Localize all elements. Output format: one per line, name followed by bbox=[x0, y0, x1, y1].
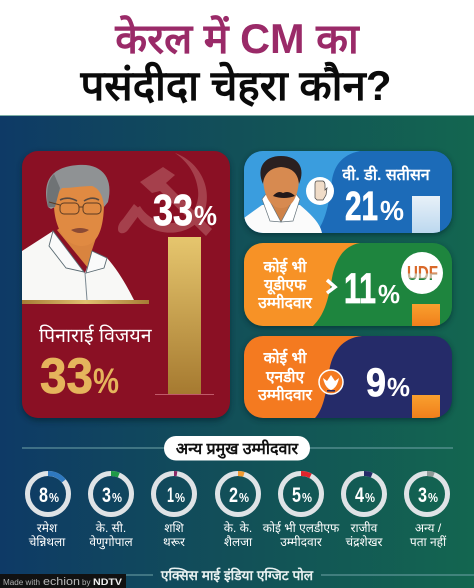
value: 11%: % bbox=[378, 279, 400, 309]
donut: Ramesh Chennithala 8%: 8 bbox=[39, 484, 48, 507]
donut: others / don't know 3%: अन्य / bbox=[415, 521, 442, 535]
watermark: echion bbox=[43, 576, 80, 588]
donut: Shashi Tharoor 1% bbox=[154, 474, 194, 549]
donut: Rajeev Chandrasekhar 4%: % bbox=[365, 491, 375, 505]
donut: any LDF candidate 5%: % bbox=[302, 491, 312, 505]
value: 9% bbox=[366, 368, 410, 397]
donut: K. C. Venugopal 3%: 3 bbox=[102, 484, 111, 507]
donut: any LDF candidate 5%: उम्मीदवार bbox=[280, 535, 323, 549]
donut: others / don't know 3% bbox=[406, 474, 448, 549]
arrow bbox=[327, 280, 335, 293]
donut: Shashi Tharoor 1%: थरूर bbox=[163, 535, 186, 549]
bar bbox=[412, 395, 440, 418]
watermark bbox=[0, 574, 126, 588]
title bbox=[79, 15, 392, 109]
donut: Rajeev Chandrasekhar 4%: राजीव bbox=[351, 521, 378, 535]
donut: others / don't know 3%: पता नहीं bbox=[410, 535, 447, 549]
panel: V. D. Satheesan bbox=[244, 151, 452, 233]
label: any UDF candidate bbox=[257, 257, 312, 312]
donut: Ramesh Chennithala 8%: % bbox=[49, 491, 59, 505]
watermark: NDTV bbox=[93, 577, 122, 587]
panel: Pinarayi Vijayan bbox=[22, 151, 230, 418]
donut: K. C. Venugopal 3%: के. सी. bbox=[96, 521, 126, 535]
value: 9%: 9 bbox=[366, 361, 386, 405]
gold divider bbox=[22, 300, 149, 304]
portrait: V. D. Satheesan bbox=[244, 156, 322, 233]
icon: Congress hand bbox=[306, 177, 334, 205]
label: any NDA candidate: एनडीए bbox=[265, 367, 305, 386]
donut: Rajeev Chandrasekhar 4%: चंद्रशेखर bbox=[346, 535, 384, 549]
watermark: Made with bbox=[3, 578, 40, 587]
source: Axis My India exit poll: एक्सिस माई इंडिया एग्जिट पोल bbox=[160, 567, 314, 583]
donut: Ramesh Chennithala 8%: चेन्निथला bbox=[29, 535, 66, 549]
gold bar bbox=[168, 237, 201, 394]
donut: Ramesh Chennithala 8%: रमेश bbox=[37, 521, 58, 535]
value: 11% bbox=[346, 273, 400, 304]
value: 21% bbox=[346, 191, 404, 220]
title: पसंदीदा चेहरा कौन? bbox=[79, 61, 392, 109]
icon: hammer and sickle bbox=[118, 153, 212, 236]
value: 21%: % bbox=[380, 195, 404, 226]
donut: K. C. Venugopal 3%: % bbox=[112, 491, 122, 505]
donut: K. K. Shailaja 2%: के. के. bbox=[224, 521, 252, 535]
value: 33%: % bbox=[93, 362, 119, 401]
donut: K. K. Shailaja 2%: % bbox=[239, 491, 249, 505]
donut: Shashi Tharoor 1%: 1 bbox=[167, 484, 174, 507]
panel: any NDA candidate bbox=[244, 336, 452, 418]
icon: UDF: UDF bbox=[407, 263, 438, 285]
panel: any UDF candidate bbox=[244, 243, 452, 326]
value: 9%: % bbox=[387, 372, 410, 402]
title: केरल में CM का bbox=[114, 15, 360, 62]
bar bbox=[412, 304, 440, 326]
icon: UDF bbox=[401, 252, 443, 294]
name: V. D. Satheesan: वी. डी. सतीसन bbox=[341, 165, 431, 184]
donut: K. K. Shailaja 2%: शैलजा bbox=[224, 535, 253, 549]
donut: any LDF candidate 5%: कोई भी एलडीएफ bbox=[263, 521, 340, 535]
portrait: Pinarayi Vijayan bbox=[22, 165, 134, 300]
donut: K. C. Venugopal 3%: वेणुगोपाल bbox=[89, 535, 133, 550]
watermark: by bbox=[82, 578, 90, 587]
donut: any LDF candidate 5%: 5 bbox=[292, 484, 301, 507]
donut: Rajeev Chandrasekhar 4%: 4 bbox=[355, 484, 364, 507]
donut: Shashi Tharoor 1%: शशि bbox=[164, 521, 185, 535]
name: Pinarayi Vijayan: पिनाराई विजयन bbox=[39, 324, 153, 347]
icon: BJP lotus bbox=[319, 370, 343, 394]
donut: K. K. Shailaja 2%: 2 bbox=[229, 484, 238, 507]
section heading: other prominent candidates: अन्य प्रमुख उम्मीदवार bbox=[176, 439, 300, 459]
value: 21%: 21 bbox=[345, 183, 378, 229]
bar value: 33%: 33 bbox=[153, 186, 193, 235]
donut: K. C. Venugopal 3% bbox=[89, 474, 133, 550]
donut: K. K. Shailaja 2% bbox=[218, 474, 258, 549]
label: any UDF candidate: उम्मीदवार bbox=[257, 293, 312, 312]
donut: others / don't know 3%: % bbox=[428, 491, 438, 505]
bar value: 33%: % bbox=[194, 200, 217, 231]
label: any UDF candidate: कोई भी bbox=[263, 257, 307, 276]
section heading: other prominent candidates bbox=[22, 436, 453, 460]
donut: Ramesh Chennithala 8% bbox=[28, 474, 68, 549]
bar bbox=[412, 196, 440, 233]
label: any NDA candidate: उम्मीदवार bbox=[257, 385, 312, 404]
donut: Shashi Tharoor 1%: % bbox=[175, 491, 185, 505]
donut: Rajeev Chandrasekhar 4% bbox=[344, 474, 384, 549]
donut: any LDF candidate 5% bbox=[263, 474, 340, 549]
donut: others / don't know 3%: 3 bbox=[418, 484, 427, 507]
label: any NDA candidate: कोई भी bbox=[263, 348, 307, 367]
label: any NDA candidate bbox=[257, 348, 312, 404]
value: 33%: 33 bbox=[40, 348, 93, 404]
value: 11%: 11 bbox=[344, 265, 376, 313]
label: any UDF candidate: यूडीएफ bbox=[263, 275, 307, 295]
